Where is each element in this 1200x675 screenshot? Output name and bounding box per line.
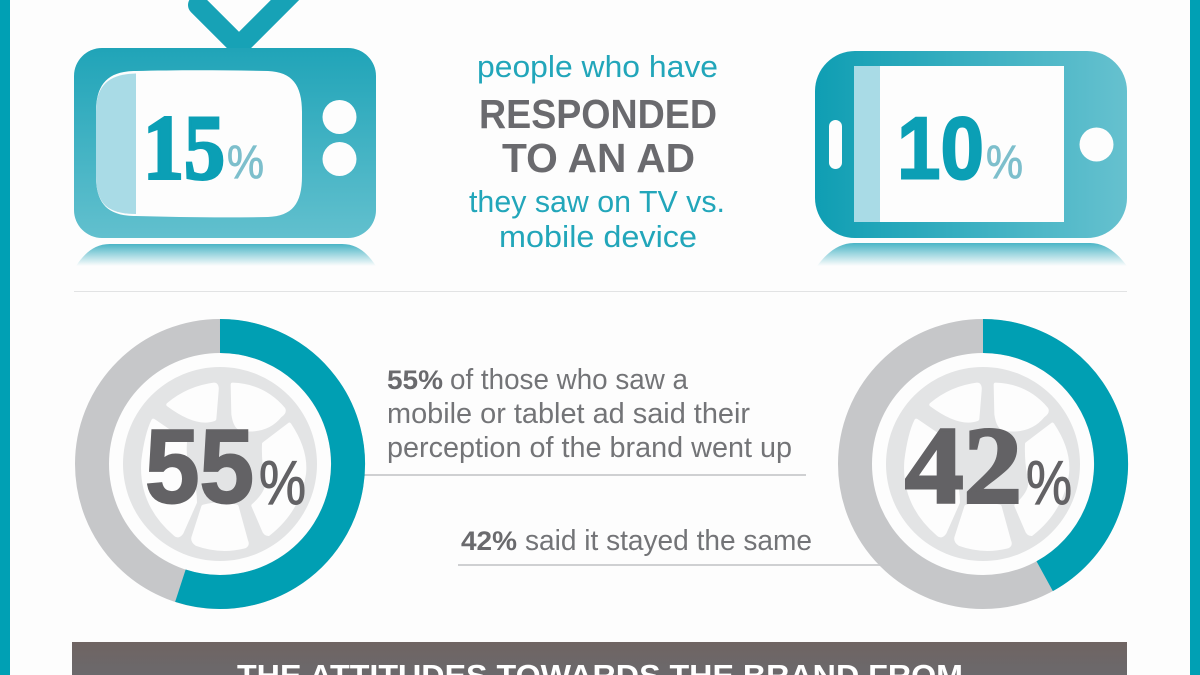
icon: wheel — [886, 367, 1080, 561]
tv body — [74, 48, 376, 238]
emphasis line: RESPONDED — [479, 91, 717, 137]
phone body — [815, 51, 1127, 238]
figure 42: 42 — [905, 404, 1022, 526]
text block: 55% perception — [387, 364, 792, 464]
phone speaker — [829, 120, 842, 169]
text line: mobile or tablet ad said their — [387, 398, 750, 430]
icon: wheel — [123, 367, 317, 561]
leader line 55 — [364, 474, 806, 476]
text line: people who have — [477, 49, 718, 84]
emphasis line: TO AN AD — [502, 135, 695, 181]
text block: 42% same — [461, 525, 812, 557]
tv percent sign: % — [227, 135, 264, 188]
icon: smartphone with 10% — [815, 51, 1127, 238]
leader line 42 — [458, 564, 882, 566]
bold figure: 42% — [461, 526, 517, 556]
teal segment 55% — [180, 336, 348, 592]
text line: they saw on TV vs. — [469, 184, 725, 219]
left teal border — [0, 0, 10, 675]
grey ring — [855, 336, 1111, 592]
text line: mobile device — [499, 219, 697, 254]
donut chart 55% — [92, 336, 348, 592]
percent sign: % — [1026, 449, 1072, 518]
banner background — [72, 642, 1127, 675]
icon: tv antenna — [198, 0, 294, 46]
donut chart 42% — [855, 336, 1111, 592]
text line: perception of the brand went up — [387, 432, 792, 464]
grey ring — [92, 336, 348, 592]
tv knob bottom — [322, 142, 356, 176]
phone screen highlight — [854, 66, 880, 222]
bold figure: 55% — [387, 365, 443, 395]
tv screen highlight — [96, 74, 136, 214]
phone home button — [1080, 128, 1114, 162]
text line: said it stayed the same — [525, 525, 812, 557]
percent sign: % — [259, 449, 306, 518]
heading: responded to an ad — [469, 49, 725, 254]
phone screen — [854, 66, 1064, 222]
tv knob top — [322, 100, 356, 134]
figure 55: 55 — [145, 408, 254, 526]
phone percent sign: % — [986, 135, 1023, 188]
phone figure 10: 10 — [897, 98, 984, 198]
phone reflection — [817, 243, 1127, 266]
tv reflection — [76, 244, 376, 266]
tv screen — [96, 70, 302, 217]
tv figure 15: 15 — [143, 96, 225, 198]
banner: attitudes towards the brand — [72, 642, 1127, 675]
right teal border — [1190, 0, 1200, 675]
text line: of those who saw a — [450, 364, 689, 396]
teal segment 42% — [983, 336, 1111, 576]
icon: television with 15% — [74, 0, 376, 238]
